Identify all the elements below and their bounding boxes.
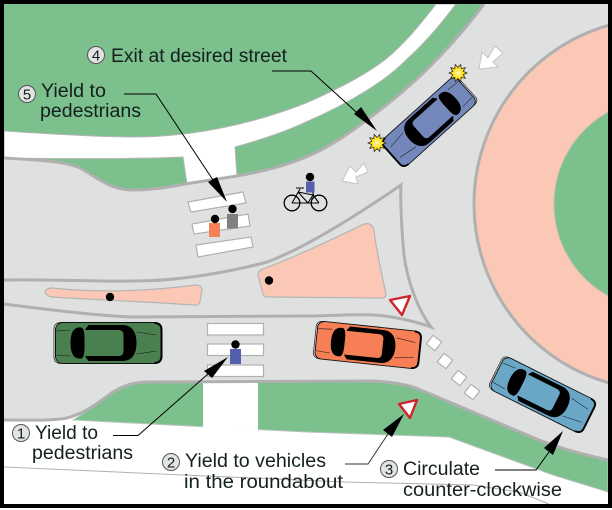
label 2: 2: [167, 454, 175, 472]
far sidewalk line: [4, 467, 549, 504]
label 1: pedestrians: [32, 443, 133, 464]
lower crosswalk: [208, 324, 264, 376]
turn signal rear: [449, 64, 467, 82]
label 3: [380, 459, 562, 501]
upper sidewalk: [4, 4, 456, 184]
central island: [474, 18, 612, 390]
lower roadside ground: [4, 381, 608, 504]
leader arrow 5: [124, 94, 227, 202]
lower curb: [4, 381, 608, 460]
label 3: Circulate: [403, 459, 480, 480]
label 5: pedestrians: [40, 101, 141, 122]
label 1: 1: [17, 426, 25, 442]
direction arrow upper: [479, 46, 503, 69]
label 3: counter-clockwise: [403, 480, 562, 501]
direction arrow lower: [342, 163, 368, 184]
island marker left: [106, 293, 114, 301]
leader arrow 3: [495, 431, 563, 470]
car: blue circulating: [487, 355, 597, 434]
label 4: 4: [92, 48, 100, 64]
yield triangle upper: [390, 296, 410, 315]
label 2: in the roundabout: [184, 472, 344, 493]
leader arrow 1: [113, 357, 228, 436]
splitter island left: [45, 285, 202, 305]
splitter island right: [258, 224, 386, 298]
pedestrian blue: [230, 340, 241, 364]
pedestrian gray: [227, 205, 238, 228]
label 1: Yield to: [35, 423, 98, 444]
central island grass: [554, 99, 612, 309]
pedestrian orange: [209, 215, 220, 237]
label 1: [12, 423, 133, 464]
label 4: Exit at desired street: [111, 46, 288, 67]
roundabout crossing markers: [426, 335, 480, 400]
label 3: 3: [385, 462, 393, 478]
upper crosswalk: [188, 192, 253, 257]
leader arrow 4: [272, 71, 377, 131]
island marker right: [265, 276, 273, 285]
label 5: [18, 81, 141, 122]
upper curb: [4, 4, 484, 190]
median curb: [4, 185, 431, 327]
lower sidewalk stub: [203, 383, 258, 430]
car: orange: [313, 321, 422, 369]
turn signal front: [368, 134, 386, 152]
label 5: 5: [23, 86, 31, 104]
car: purple exiting: [380, 74, 479, 169]
upper grass area: [4, 4, 484, 190]
label 2: [162, 451, 344, 493]
lower grass area: [73, 381, 608, 492]
label 2: Yield to vehicles: [185, 451, 326, 472]
leader arrow 2: [345, 414, 404, 464]
car: green: [54, 322, 162, 364]
cyclist: [284, 173, 327, 211]
yield triangle lower: [399, 400, 417, 418]
label 5: Yield to: [41, 81, 106, 102]
